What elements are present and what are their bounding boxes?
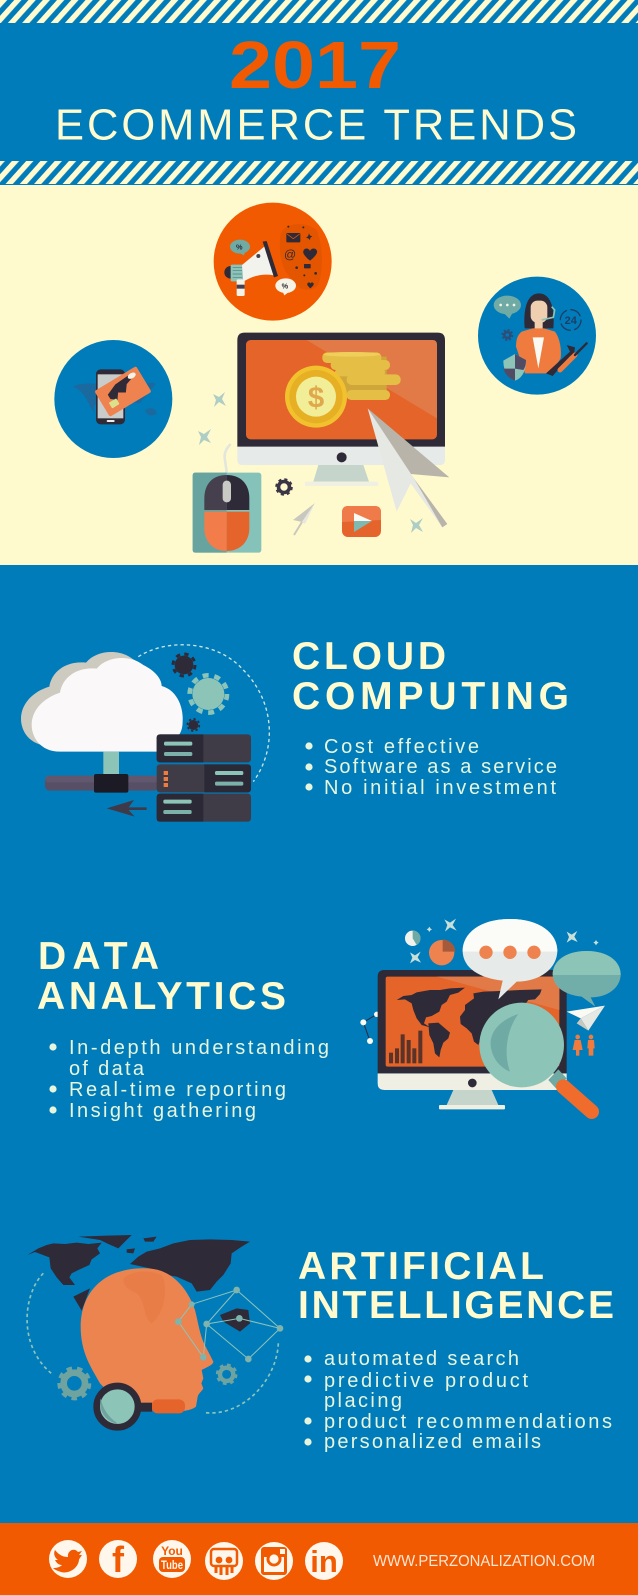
connector stem and bar bbox=[103, 752, 119, 775]
illustration: cloud computing bbox=[21, 645, 269, 822]
icon: twitter bbox=[49, 1540, 87, 1578]
section: data analytics text: ANALYTICS bbox=[37, 975, 286, 1018]
cog gears bbox=[175, 656, 193, 674]
icon: linkedin: in bbox=[310, 1544, 338, 1579]
cursor arrow bbox=[368, 408, 449, 527]
icon: sparkle stars bbox=[198, 392, 423, 533]
gears bbox=[64, 1373, 85, 1394]
world map bbox=[27, 1235, 250, 1332]
white speech bubble bbox=[463, 919, 557, 999]
heading: DATA bbox=[38, 935, 159, 978]
pie chart icons bbox=[429, 940, 454, 965]
dashed orbit bbox=[138, 645, 269, 782]
monitor stand bbox=[313, 465, 369, 482]
icon: marketing megaphone circle bbox=[214, 203, 332, 321]
orange head bbox=[81, 1268, 213, 1412]
section: data analytics text bbox=[37, 935, 329, 1122]
section: cloud computing text: COMPUTING bbox=[292, 675, 569, 718]
magnifying glass bbox=[548, 1069, 567, 1088]
title: year: 2017 bbox=[229, 28, 401, 103]
icon: facebook: f bbox=[112, 1539, 125, 1580]
illustration: desktop monitor with coins and cursor bbox=[237, 333, 449, 527]
bullet list bbox=[305, 736, 557, 799]
bullet list: personalized emails bbox=[324, 1431, 541, 1453]
coin stack bbox=[337, 357, 387, 398]
bullet list: No initial investment bbox=[324, 777, 556, 799]
icon: facebook bbox=[99, 1539, 137, 1580]
panel: hero illustration bbox=[0, 185, 638, 565]
title: ecommerce trends: ECOMMERCE TRENDS bbox=[55, 102, 577, 150]
icon: computer mouse bbox=[193, 444, 261, 553]
monitor screen bbox=[237, 333, 445, 447]
icon: paper plane bbox=[293, 503, 315, 535]
sparkle stars bbox=[410, 919, 599, 963]
heading: ARTIFICIAL bbox=[298, 1245, 544, 1288]
panel: header banner bbox=[0, 0, 638, 185]
bullet list: automated search bbox=[324, 1348, 519, 1370]
icon: mobile payment circle bbox=[54, 340, 172, 458]
icon: youtube: Tube bbox=[161, 1558, 183, 1572]
illustration: data analytics monitor bbox=[360, 919, 621, 1112]
network graph bbox=[178, 1290, 280, 1359]
bullet list: In-depth understanding bbox=[69, 1037, 329, 1059]
world map bbox=[397, 988, 542, 1057]
illustration: artificial intelligence head bbox=[27, 1235, 283, 1427]
illustration: desktop monitor with coins and cursor: $ bbox=[308, 381, 324, 414]
icon: slideshare bbox=[205, 1542, 243, 1580]
monitor bbox=[447, 1090, 498, 1105]
icon: marketing megaphone circle: @ bbox=[284, 247, 296, 261]
bullet list: Insight gathering bbox=[69, 1100, 256, 1122]
bullet list bbox=[304, 1348, 612, 1453]
website url: WWW.PERZONALIZATION.COM bbox=[373, 1553, 595, 1570]
paper plane bbox=[567, 1006, 605, 1018]
icon: play button bbox=[342, 506, 381, 537]
bullet list: of data bbox=[69, 1058, 145, 1080]
server stack bbox=[157, 734, 251, 762]
icon: marketing megaphone circle: % bbox=[282, 281, 289, 290]
panel: footer bbox=[0, 1523, 638, 1595]
dollar coin bbox=[285, 366, 347, 428]
icon: linkedin bbox=[305, 1542, 343, 1580]
icon: instagram bbox=[255, 1542, 293, 1580]
icon: marketing megaphone circle: % bbox=[236, 242, 243, 251]
bullet list: Real-time reporting bbox=[69, 1079, 286, 1101]
panel: main blue background bbox=[0, 565, 638, 1524]
bullet list: product recommendations bbox=[324, 1411, 612, 1433]
bullet list: Cost effective bbox=[324, 736, 479, 758]
magnifying glass bbox=[152, 1399, 185, 1413]
bullet list bbox=[49, 1037, 329, 1122]
section: artificial intelligence text bbox=[298, 1245, 614, 1453]
icon: customer support circle bbox=[478, 277, 596, 395]
heading: CLOUD bbox=[292, 635, 446, 678]
teal speech bubble bbox=[553, 951, 621, 1007]
people icons bbox=[573, 1035, 595, 1056]
icon: customer support circle: 24 bbox=[565, 315, 578, 327]
cloud bbox=[21, 652, 172, 746]
bullet list: Software as a service bbox=[324, 756, 557, 778]
bar chart bbox=[389, 1031, 422, 1063]
network dots bbox=[363, 1014, 377, 1041]
section: artificial intelligence text: INTELLIGENCE bbox=[298, 1284, 614, 1327]
section: cloud computing text bbox=[292, 635, 569, 799]
bullet list: predictive product bbox=[324, 1370, 528, 1392]
bullet list: placing bbox=[324, 1390, 402, 1412]
icon: youtube: You bbox=[161, 1544, 183, 1558]
icon: gear bbox=[276, 480, 292, 494]
icon: youtube bbox=[153, 1540, 191, 1578]
dashed arcs bbox=[27, 1273, 53, 1375]
arrow bbox=[107, 800, 147, 817]
